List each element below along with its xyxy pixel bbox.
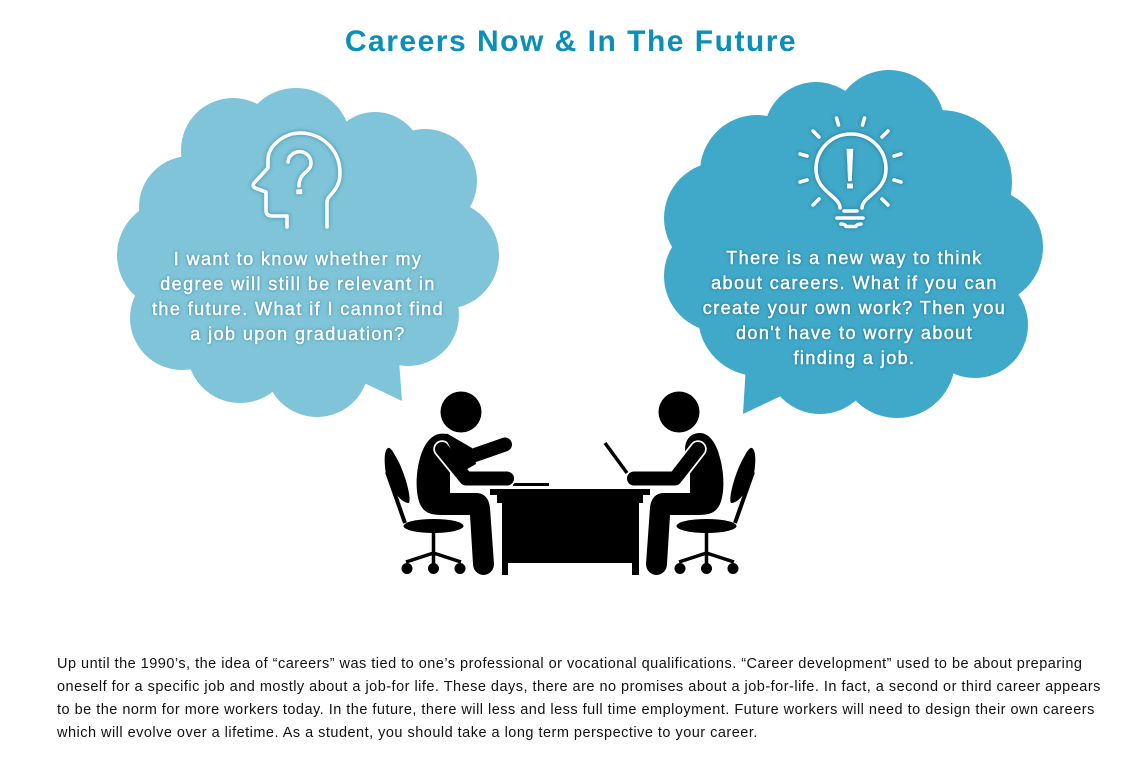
cloud shape: darker blue speech bubble xyxy=(664,70,1043,418)
figure: student seated at left xyxy=(417,392,507,575)
figure: advisor seated at right xyxy=(605,392,723,575)
speech text: advisor answer: There is a new way to think xyxy=(726,248,983,268)
body paragraph: which will evolve over a lifetime. As a student, you should take a long term perspective to your career. xyxy=(57,724,758,740)
speech text: advisor answer: don't have to worry about xyxy=(736,323,973,343)
chair: right office chair xyxy=(674,448,755,574)
icon: head with question mark xyxy=(250,129,344,230)
speech text: advisor answer: create your own work? Then you xyxy=(703,298,1006,318)
illustration: two people talking across a desk xyxy=(384,392,756,575)
chair: left office chair xyxy=(385,448,466,574)
speech text: advisor answer: finding a job. xyxy=(794,348,915,368)
speech text: advisor answer xyxy=(702,248,1006,370)
speech text: student question xyxy=(150,249,444,346)
body paragraph: Up until the 1990’s, the idea of “careers” was tied to one’s professional or vocational qualifications. “Career development” used to be about preparing xyxy=(57,656,1082,672)
speech text: advisor answer: about careers. What if you can xyxy=(711,273,998,293)
book on desk xyxy=(513,483,549,486)
desk xyxy=(490,489,650,575)
cloud shape: light blue speech bubble xyxy=(117,88,499,417)
panel: advisor thought bubble xyxy=(664,70,1043,418)
speech text: student question: the future. What if I cannot find xyxy=(152,299,444,319)
title: Careers Now & In The Future xyxy=(345,25,797,58)
speech text: student question: degree will still be relevant in xyxy=(160,274,436,294)
speech text: student question: a job upon graduation? xyxy=(190,324,406,344)
panel: student thought bubble xyxy=(117,88,499,417)
speech text: student question: I want to know whether my xyxy=(174,249,422,269)
body paragraph xyxy=(57,656,1101,740)
icon: light bulb with exclamation mark xyxy=(797,115,904,230)
body paragraph: to be the norm for more workers today. In the future, there will less and less full time employment. Future workers will need to design their own careers xyxy=(57,702,1095,718)
body paragraph: oneself for a specific job and mostly about a job-for life. These days, there are no promises about a job-for-life. In fact, a second or third career appears xyxy=(57,678,1101,694)
